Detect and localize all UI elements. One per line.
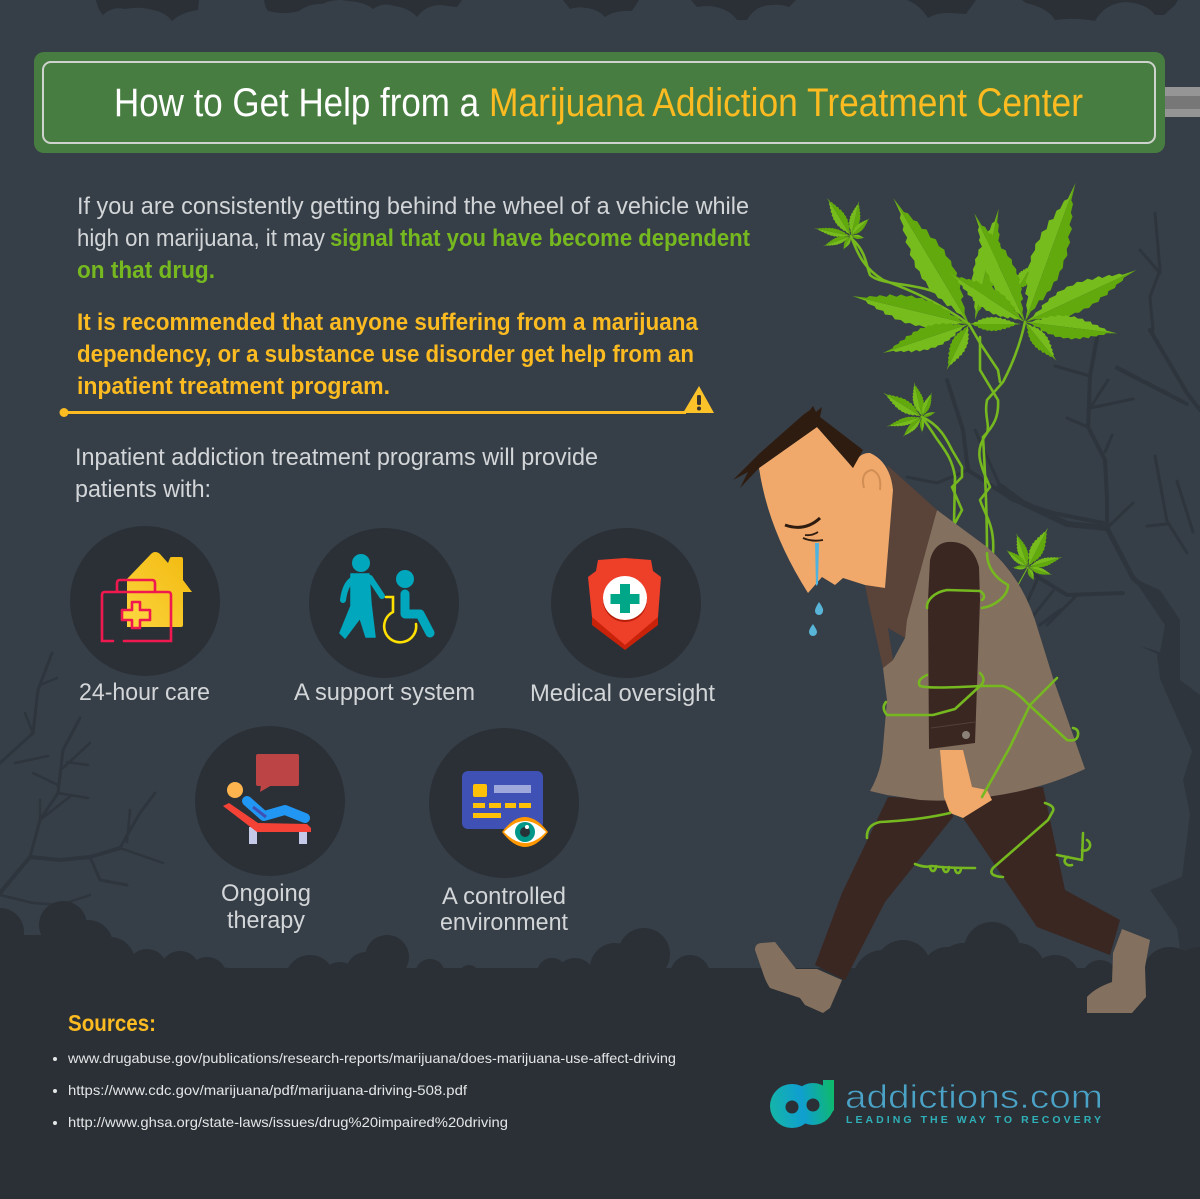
recommendation paragraph: It is recommended that anyone suffering from a marijuana — [77, 309, 699, 336]
icon: patient on couch with speech bubble — [223, 754, 311, 844]
item: support system — [294, 528, 475, 706]
sources — [53, 1010, 676, 1130]
list intro: patients with: — [75, 476, 211, 503]
cannabis leaf: large right — [943, 177, 1143, 366]
tear drops — [809, 602, 823, 636]
icon: card with eye — [462, 771, 548, 847]
recommendation paragraph: dependency, or a substance use disorder get help from an — [77, 341, 694, 368]
label: 24-hour care — [79, 679, 210, 706]
cannabis leaf: middle small — [880, 381, 937, 440]
icon: walking person and wheelchair user — [340, 554, 430, 642]
label — [221, 880, 311, 934]
recommendation paragraph — [77, 309, 699, 400]
heading — [114, 81, 1083, 125]
head — [733, 406, 893, 593]
title banner — [34, 52, 1165, 153]
intro paragraph: high on marijuana, it may — [77, 225, 325, 252]
cannabis leaf: top left small — [813, 194, 872, 251]
road stripe behind banner — [1165, 87, 1200, 117]
logo wordmark: addictions.com — [845, 1078, 1103, 1115]
sources heading: Sources: — [68, 1010, 156, 1036]
label: therapy — [227, 907, 305, 934]
cannabis leaf: large left — [849, 189, 1021, 373]
item: controlled environment — [429, 728, 579, 936]
icon: shield with cross — [588, 558, 661, 650]
item: 24-hour care — [70, 526, 220, 706]
item: ongoing therapy — [195, 726, 345, 934]
item: medical oversight — [530, 528, 715, 707]
hair — [733, 406, 863, 488]
logo mark — [770, 1080, 834, 1128]
list intro — [75, 444, 598, 503]
tear — [815, 543, 819, 586]
icon: house and first aid kit — [102, 552, 192, 641]
intro paragraph: signal that you have become dependent — [330, 225, 750, 252]
source list: www.drugabuse.gov/publications/research-reports/marijuana/does-marijuana-use-affect-driving — [67, 1050, 676, 1066]
dark treetops along top edge — [96, 0, 1178, 21]
collar — [865, 465, 937, 668]
source list — [53, 1050, 676, 1130]
vines behind man — [851, 236, 1025, 553]
intro paragraph — [77, 193, 750, 284]
coat — [870, 510, 1085, 801]
illustration: man with marijuana vines — [733, 177, 1150, 1013]
label: A support system — [294, 679, 475, 706]
heading: Marijuana Addiction Treatment Center — [489, 81, 1083, 125]
ground with bushes — [0, 901, 1200, 1199]
label: A controlled — [442, 883, 566, 910]
logo — [770, 1078, 1103, 1128]
list intro: Inpatient addiction treatment programs will provide — [75, 444, 598, 471]
label: Medical oversight — [530, 680, 715, 707]
icon: warning triangle — [683, 386, 714, 413]
hand — [940, 750, 992, 818]
source list: http://www.ghsa.org/state-laws/issues/drug%20impaired%20driving — [68, 1114, 508, 1130]
sleeve — [928, 542, 980, 749]
cannabis leaf: lower right small — [1004, 525, 1064, 585]
trousers — [815, 787, 1120, 980]
intro paragraph: on that drug. — [77, 257, 215, 284]
label: Ongoing — [221, 880, 311, 907]
source list: https://www.cdc.gov/marijuana/pdf/marijuana-driving-508.pdf — [68, 1082, 467, 1098]
logo tagline: LEADING THE WAY TO RECOVERY — [846, 1114, 1101, 1126]
closed eye — [785, 518, 820, 527]
divider with warning icon — [60, 386, 714, 417]
shoes — [755, 929, 1150, 1013]
background tree: left — [0, 653, 163, 905]
background tree: right — [907, 213, 1200, 960]
label: environment — [440, 909, 568, 936]
recommendation paragraph: inpatient treatment program. — [77, 373, 390, 400]
intro paragraph: If you are consistently getting behind the wheel of a vehicle while — [77, 193, 749, 220]
vines wrapping man — [867, 553, 1090, 877]
label — [440, 883, 568, 936]
heading: How to Get Help from a — [114, 81, 480, 125]
